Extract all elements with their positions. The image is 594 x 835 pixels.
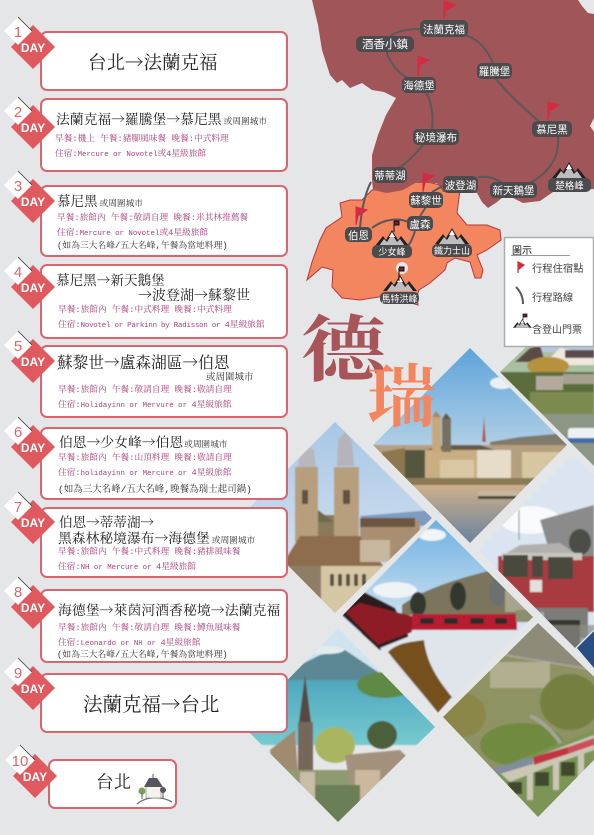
badge: day 5: 5 (14, 338, 22, 355)
map: route line (360, 29, 558, 248)
map: place labels: 波登湖 (445, 178, 476, 193)
panel: day 2 (40, 98, 288, 172)
badge: day 1: DAY (21, 41, 45, 55)
badge: day 2: 2 (14, 104, 22, 121)
panel: day 7 (40, 507, 288, 578)
panel: day 4: 慕尼黑→新天鵝堡 (56, 269, 165, 289)
badge: day 8 (4, 576, 55, 629)
photo: Bernina railway spiral viaduct (438, 620, 594, 820)
map: place labels (345, 20, 591, 305)
photo: lake and church (250, 628, 435, 822)
badge: day 9: DAY (21, 682, 45, 696)
panel: day 6: 早餐:旅館內 午餐:山頂料理 晚餐:敬請自理 (58, 453, 232, 463)
photo: red locomotive (475, 450, 594, 650)
icon: house on hill (136, 774, 172, 804)
title: 瑞: 瑞 (367, 342, 436, 441)
badge: day 1 (4, 16, 55, 69)
panel: day 2: 法蘭克福→羅騰堡→慕尼黑或周圍城市 (56, 108, 267, 128)
panel: day 8: 海德堡→萊茵河酒香秘境→法蘭克福 (58, 599, 280, 619)
map: place labels: 楚格峰 (555, 178, 584, 192)
badge: day 4: 4 (14, 264, 22, 281)
map: stay flags (356, 1, 559, 225)
map: mountain icons (375, 162, 586, 291)
badge: day 7: 7 (14, 499, 22, 516)
photo: Basel riverside (500, 347, 594, 466)
map: place labels: 酒香小鎮 (362, 36, 408, 52)
legend: 含登山門票 (532, 321, 582, 336)
panel: day 4: →波登湖→蘇黎世 (138, 285, 250, 305)
panel: day 9 (40, 673, 288, 733)
badge: day 10: 10 (12, 753, 28, 770)
panel: day 2: 住宿:Mercure or Novotel或4星級旅館 (55, 149, 206, 159)
panel: day 3: 早餐:旅館內 午餐:敬請自理 晚餐:米其林推薦餐 (57, 213, 248, 223)
panel: day 3 (40, 185, 288, 257)
legend (504, 238, 594, 346)
badge: day 2 (4, 96, 55, 149)
badge: day 7 (4, 492, 55, 544)
map: place labels: 蘇黎世 (410, 193, 442, 208)
panel: day 7: 伯恩→蒂蒂湖→ (59, 511, 154, 531)
map: place labels: 少女峰 (378, 245, 406, 258)
panel: day 8 (40, 589, 288, 663)
badge: day 4 (4, 256, 55, 309)
panel: day 9: 法蘭克福→台北 (83, 689, 220, 717)
badge: day 10: DAY (23, 770, 47, 784)
photo: blue corner (577, 631, 594, 668)
photo: Grossmunster towers (240, 420, 435, 616)
photo: train on stone viaduct (340, 518, 540, 715)
badge: day 3: DAY (21, 195, 45, 209)
badge: day 10 (5, 744, 57, 798)
legend: 行程路線 (532, 289, 573, 304)
panel: day 5: 或周圍城市 (206, 369, 254, 383)
badge: day 8: 8 (14, 584, 22, 601)
map: Germany (312, 0, 594, 208)
panel: day 8: 早餐:旅館內 午餐:敬請自理 晚餐:鱒魚風味餐 (58, 623, 240, 633)
map: place labels: 盧森 (410, 217, 431, 232)
panel: day 3: 慕尼黑或周圍城市 (57, 190, 143, 210)
panel: day 5: 早餐:旅館內 午餐:敬請自理 晚餐:敬請自理 (58, 385, 232, 395)
panel: day 3: 住宿:Mercure or Novotel或4星級旅館 (57, 228, 208, 238)
panel: day 2: 早餐:機上 午餐:豬腳風味餐 晚餐:中式料理 (55, 134, 229, 144)
map: place labels: 鐵力士山 (434, 244, 470, 257)
panel: day 10: 台北 (96, 769, 131, 794)
title: 德: 德 (301, 292, 392, 396)
panel: day 4: 住宿:Novotel or Parkinn by Radisson or 4星級旅館 (58, 320, 265, 330)
panel: day 7: 黑森林秘境瀑布→海德堡或周圍城市 (58, 527, 255, 547)
badge: day 1: 1 (14, 24, 22, 41)
badge: day 4: DAY (21, 281, 45, 295)
map and photo collage (250, 0, 594, 822)
photo: Zurich old town (370, 345, 570, 545)
panel: day 6: (如為三大名峰/五大名峰,晚餐為瑞士起司鍋) (58, 484, 252, 495)
badge: day 2: DAY (21, 121, 45, 135)
badge: day 3: 3 (14, 178, 22, 195)
panel: day 1 (40, 31, 288, 91)
badge: day 9 (4, 658, 55, 710)
map: place labels: 法蘭克福 (423, 22, 465, 37)
panel: day 8: 住宿:Leonardo or NH or 4星級旅館 (58, 638, 200, 648)
badge: day 3 (4, 170, 55, 223)
map: place labels: 伯恩 (348, 228, 369, 243)
badge: day 6: DAY (21, 441, 45, 455)
legend: 行程住宿點 (532, 260, 583, 275)
badge: day 5: DAY (21, 355, 45, 369)
badge: day 6: 6 (14, 424, 22, 441)
map: place labels: 海德堡 (403, 78, 435, 93)
legend: 圖示 (512, 242, 532, 257)
badge: day 8: DAY (21, 601, 45, 615)
panel: day 10 (48, 759, 177, 809)
panel: day 4 (40, 264, 288, 339)
panel: day 5: 住宿:Holidayinn or Mervure or 4星級旅館 (58, 400, 231, 410)
badge: day 7: DAY (21, 516, 45, 530)
map: place labels: 秘境瀑布 (415, 130, 457, 145)
map: place labels: 新天鵝堡 (492, 183, 535, 198)
panel: day 5: 蘇黎世→盧森湖區→伯恩 (57, 351, 230, 373)
map: Switzerland (307, 180, 501, 305)
panel: day 1: 台北→法蘭克福 (88, 49, 218, 75)
panel: day 7: 住宿:NH or Mercure or 4星級旅館 (58, 562, 196, 572)
panel: day 6: 住宿:holidayinn or Mercure or 4星級旅館 (58, 468, 231, 478)
panel: day 6: 伯恩→少女峰→伯恩或周圍城市 (59, 431, 228, 451)
panel: day 8: (如為三大名峰/五大名峰,午餐為當地料理) (57, 650, 228, 660)
badge: day 9: 9 (14, 665, 22, 682)
panel: day 7: 早餐:旅館內 午餐:中式料理 晚餐:豬排風味餐 (58, 547, 240, 557)
panel: day 6 (40, 427, 288, 500)
map: place labels: 馬特洪峰 (381, 292, 418, 305)
panel: day 4: 早餐:旅館內 午餐:中式料理 晚餐:中式料理 (58, 305, 232, 315)
map: place labels: 慕尼黑 (536, 122, 568, 137)
map: place labels: 羅騰堡 (479, 64, 511, 79)
badge: day 5 (4, 330, 55, 383)
badge: day 6 (4, 416, 55, 469)
map: place labels: 蒂蒂湖 (374, 168, 406, 183)
panel: day 5 (40, 345, 288, 418)
panel: day 3: (如為三大名峰/五大名峰,午餐為當地料理) (57, 241, 228, 251)
